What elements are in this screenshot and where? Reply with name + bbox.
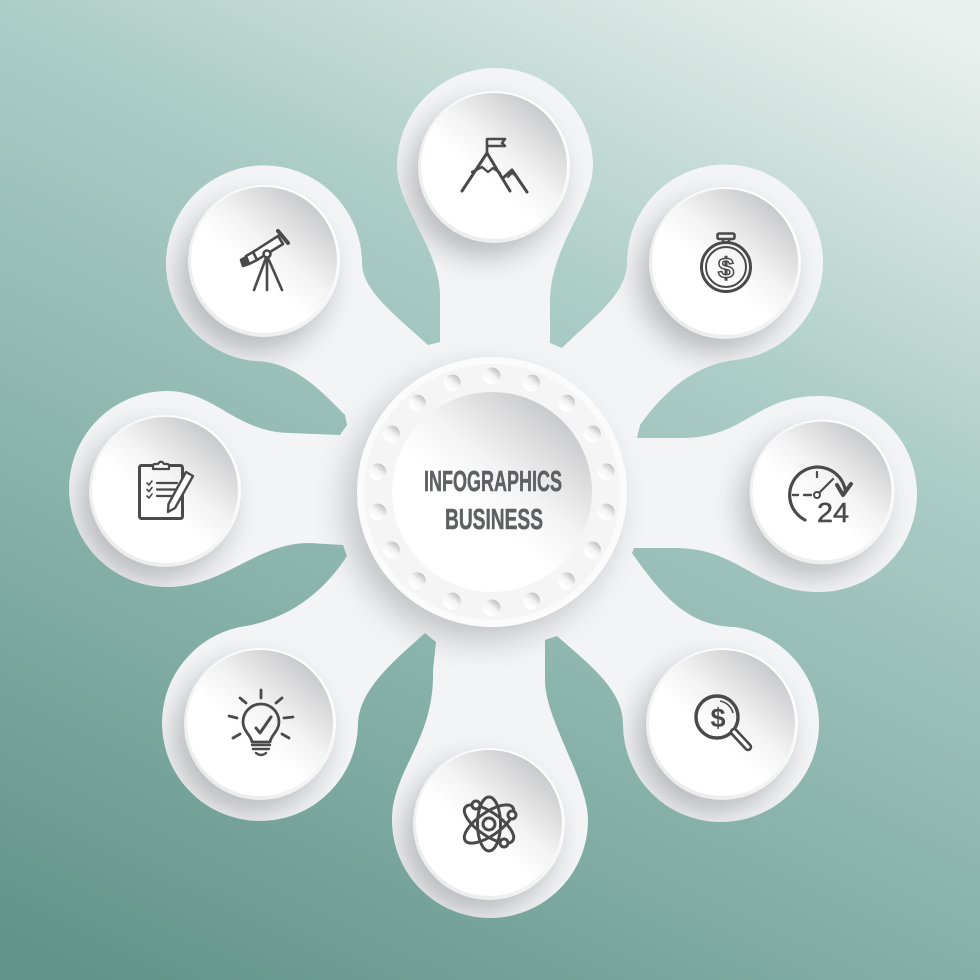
panel: central hub (345, 357, 627, 641)
icon: 24-hour clock (790, 467, 851, 528)
hub ring dimples (369, 368, 615, 616)
panel: bottom lobe (403, 748, 565, 914)
panel: top lobe (408, 91, 570, 257)
panel: bottom-right lobe (636, 648, 798, 814)
icon: magnifier with dollar: $ (710, 703, 726, 733)
icon: mountain with flag (462, 139, 527, 192)
icon: magnifier with dollar (696, 696, 748, 747)
icon: 24-hour clock: 24 (817, 497, 849, 528)
panel: right lobe (740, 420, 894, 578)
panel: left lobe (79, 415, 241, 581)
title: infographics business: INFOGRAPHICS (424, 466, 562, 498)
icon: atom (459, 797, 519, 851)
icon: light bulb with check (229, 690, 293, 755)
panel: top-right lobe (639, 187, 801, 353)
panel: top-left lobe (178, 185, 340, 353)
title: infographics business: BUSINESS (445, 504, 543, 536)
panel: bottom-left lobe (174, 648, 336, 814)
title: infographics business (424, 466, 562, 536)
icon: telescope (241, 231, 288, 290)
white flower-shaped base (69, 68, 917, 918)
icon: stopwatch with dollar (702, 234, 750, 292)
icon: stopwatch with dollar: $ (718, 253, 734, 285)
icon: clipboard with pencil (140, 462, 193, 518)
